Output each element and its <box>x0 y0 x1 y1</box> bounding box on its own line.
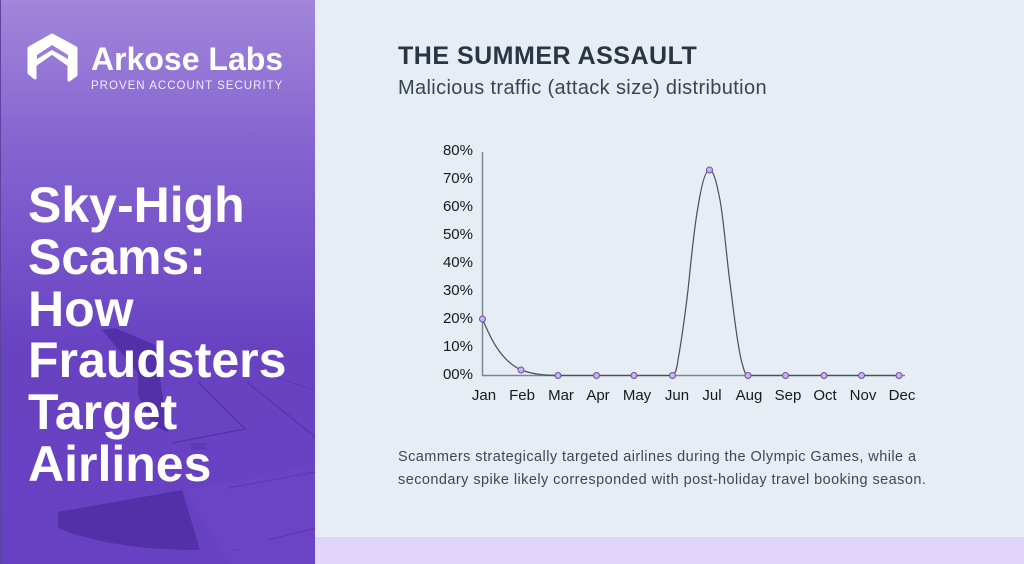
x axis labels: Aug <box>736 387 762 404</box>
panel: purple sidebar <box>0 0 315 564</box>
main title: Airlines <box>28 436 211 492</box>
description text: secondary spike likely corresponded with post-holiday travel booking season. <box>398 472 926 488</box>
axes <box>482 152 905 376</box>
x axis labels: Apr <box>586 387 610 404</box>
heading: the summer assault: THE SUMMER ASSAULT <box>398 42 697 70</box>
main title <box>28 177 286 492</box>
description text <box>398 449 926 488</box>
main title: Sky-High <box>28 177 245 233</box>
data line <box>482 170 899 376</box>
main title: Target <box>28 384 177 440</box>
y axis labels: 00% <box>443 366 473 383</box>
logo wordmark: Arkose Labs <box>91 41 283 77</box>
x axis labels: Nov <box>850 387 877 404</box>
logo: Arkose Labs <box>28 34 283 92</box>
x axis labels: Jun <box>665 387 689 404</box>
x axis labels: Oct <box>813 387 837 404</box>
main title: Scams: <box>28 229 206 285</box>
x axis labels: Jan <box>472 387 496 404</box>
y axis labels: 70% <box>443 170 473 187</box>
y axis labels: 10% <box>443 338 473 355</box>
line chart: attack size by month <box>443 142 916 404</box>
x axis labels: Feb <box>509 387 535 404</box>
description text: Scammers strategically targeted airlines during the Olympic Games, while a <box>398 449 917 465</box>
footer band <box>315 537 1024 564</box>
y axis labels: 50% <box>443 226 473 243</box>
data points <box>480 167 902 378</box>
x axis labels: Dec <box>889 387 916 404</box>
y axis labels <box>443 142 473 383</box>
image: airplane wing silhouette <box>0 0 315 564</box>
subheading: Malicious traffic (attack size) distribution <box>398 77 767 99</box>
y axis labels: 20% <box>443 310 473 327</box>
x axis labels <box>472 387 916 404</box>
x axis labels: May <box>623 387 652 404</box>
main title: How <box>28 281 134 337</box>
x axis labels: Sep <box>775 387 801 404</box>
y axis labels: 80% <box>443 142 473 159</box>
y axis labels: 40% <box>443 254 473 271</box>
y axis labels: 60% <box>443 198 473 215</box>
main title: Fraudsters <box>28 332 286 388</box>
logo tagline: PROVEN ACCOUNT SECURITY <box>91 80 283 92</box>
x axis labels: Mar <box>548 387 574 404</box>
y axis labels: 30% <box>443 282 473 299</box>
x axis labels: Jul <box>702 387 722 404</box>
icon: Arkose shield <box>28 34 78 82</box>
